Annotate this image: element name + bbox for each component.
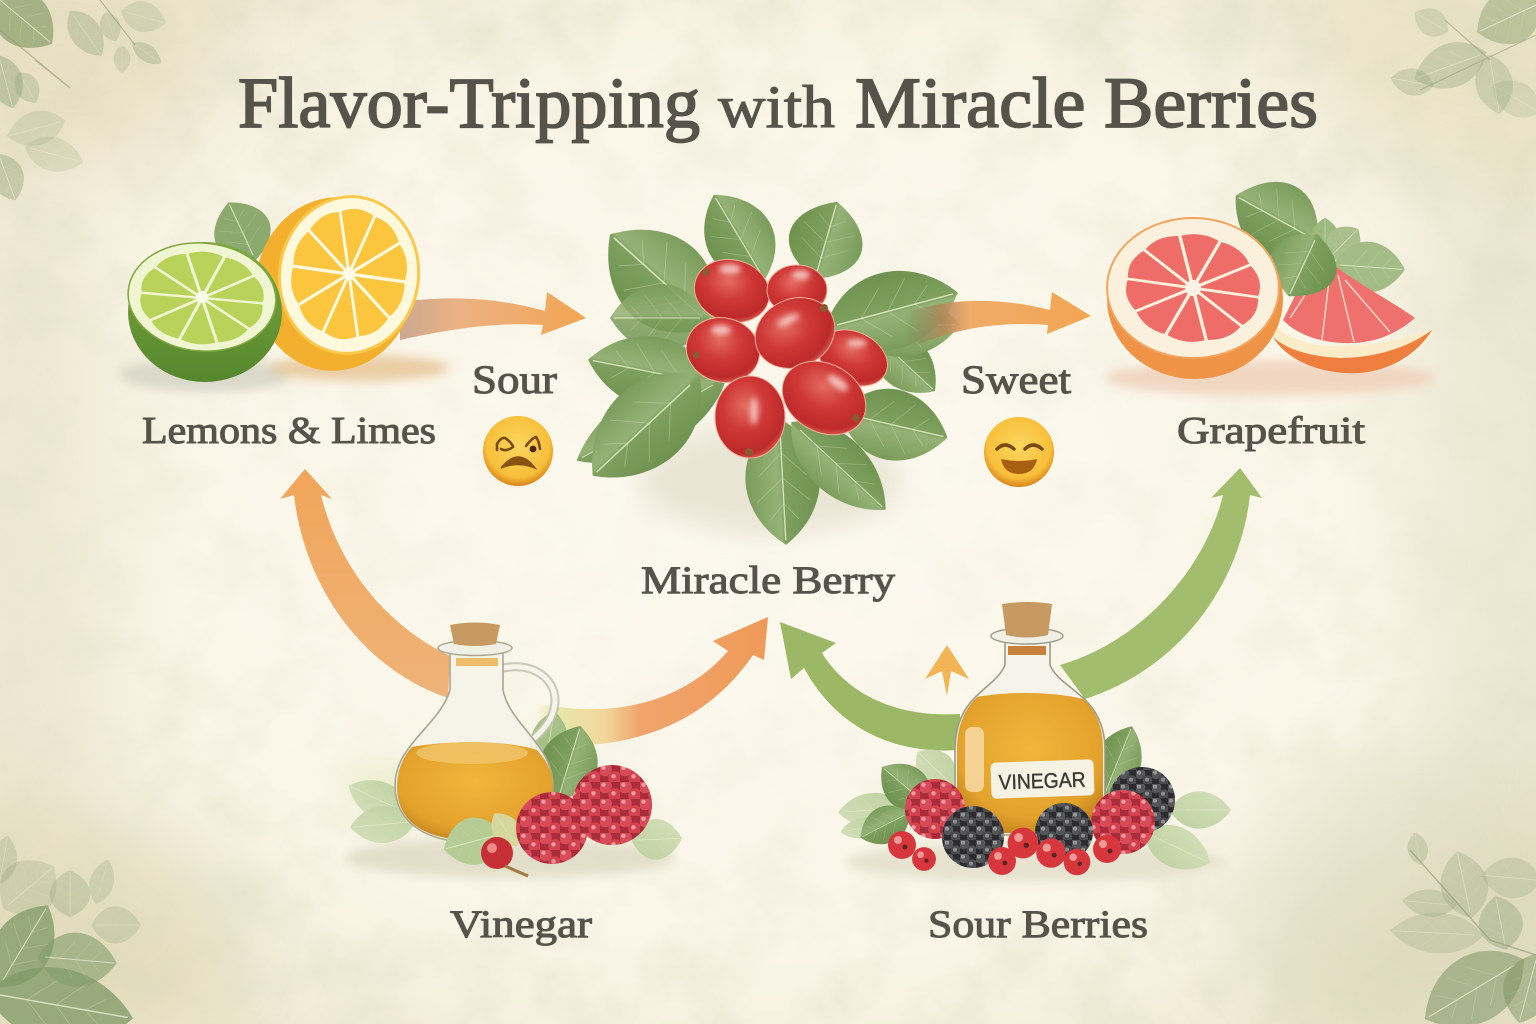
- illustration: vinegar cruet with raspberries: [341, 622, 683, 878]
- grapefruit body: [1107, 219, 1283, 379]
- bottle glass: [955, 640, 1105, 835]
- corner foliage: bottom right: [1389, 831, 1536, 1024]
- vinegar liquid: [957, 693, 1103, 833]
- lime face: [124, 237, 280, 357]
- label: Vinegar: Vinegar: [450, 903, 592, 946]
- title: Miracle Berries: [855, 63, 1318, 143]
- lemon face: [268, 186, 430, 364]
- title: [238, 63, 1318, 143]
- corner foliage: top right: [1388, 0, 1536, 127]
- raspberries: [572, 765, 652, 845]
- arrow: miracle berry to grapefruit: [905, 292, 1091, 350]
- bottle label: VINEGAR: [998, 768, 1086, 795]
- berry highlights: [711, 264, 867, 425]
- oil: [397, 742, 553, 840]
- lime body: [128, 242, 282, 382]
- small orange up arrow: [925, 645, 969, 696]
- berries: [1109, 767, 1175, 833]
- emoji: sour face: [483, 416, 553, 486]
- grapefruit wedge: [1273, 252, 1432, 373]
- corner foliage: top left: [0, 0, 170, 206]
- arrow: sour berries to miracle berry: [780, 622, 960, 751]
- illustration: lemons and limes: [120, 185, 450, 392]
- label: Sweet: Sweet: [961, 357, 1071, 402]
- label: Sour: Sour: [472, 357, 557, 402]
- label: Miracle Berry: Miracle Berry: [641, 559, 896, 602]
- emoji: happy face: [984, 417, 1054, 487]
- arrow: sour berries up to grapefruit: [1060, 468, 1262, 699]
- illustration: miracle berry cluster: [562, 177, 968, 547]
- handle: [503, 667, 555, 742]
- lemon body: [242, 185, 428, 383]
- grapefruit face: [1107, 218, 1279, 358]
- title: Flavor-Tripping: [238, 63, 700, 143]
- title: with: [718, 74, 835, 140]
- corner foliage: bottom left: [0, 833, 141, 1024]
- arrow: citrus to miracle berry: [400, 292, 586, 340]
- berries: [679, 251, 897, 458]
- arrow: vinegar to miracle berry: [535, 617, 768, 746]
- bottle glass: [395, 652, 553, 842]
- label: Sour Berries: Sour Berries: [928, 903, 1148, 946]
- label: Lemons & Limes: Lemons & Limes: [142, 410, 436, 452]
- label: Grapefruit: Grapefruit: [1177, 410, 1366, 452]
- illustration: grapefruit: [1105, 163, 1435, 396]
- berry tips: [692, 268, 860, 456]
- illustration: vinegar bottle with sour berries: [837, 602, 1231, 882]
- arrow: vinegar up to lemons and limes: [280, 469, 450, 698]
- bottle label: [990, 759, 1095, 799]
